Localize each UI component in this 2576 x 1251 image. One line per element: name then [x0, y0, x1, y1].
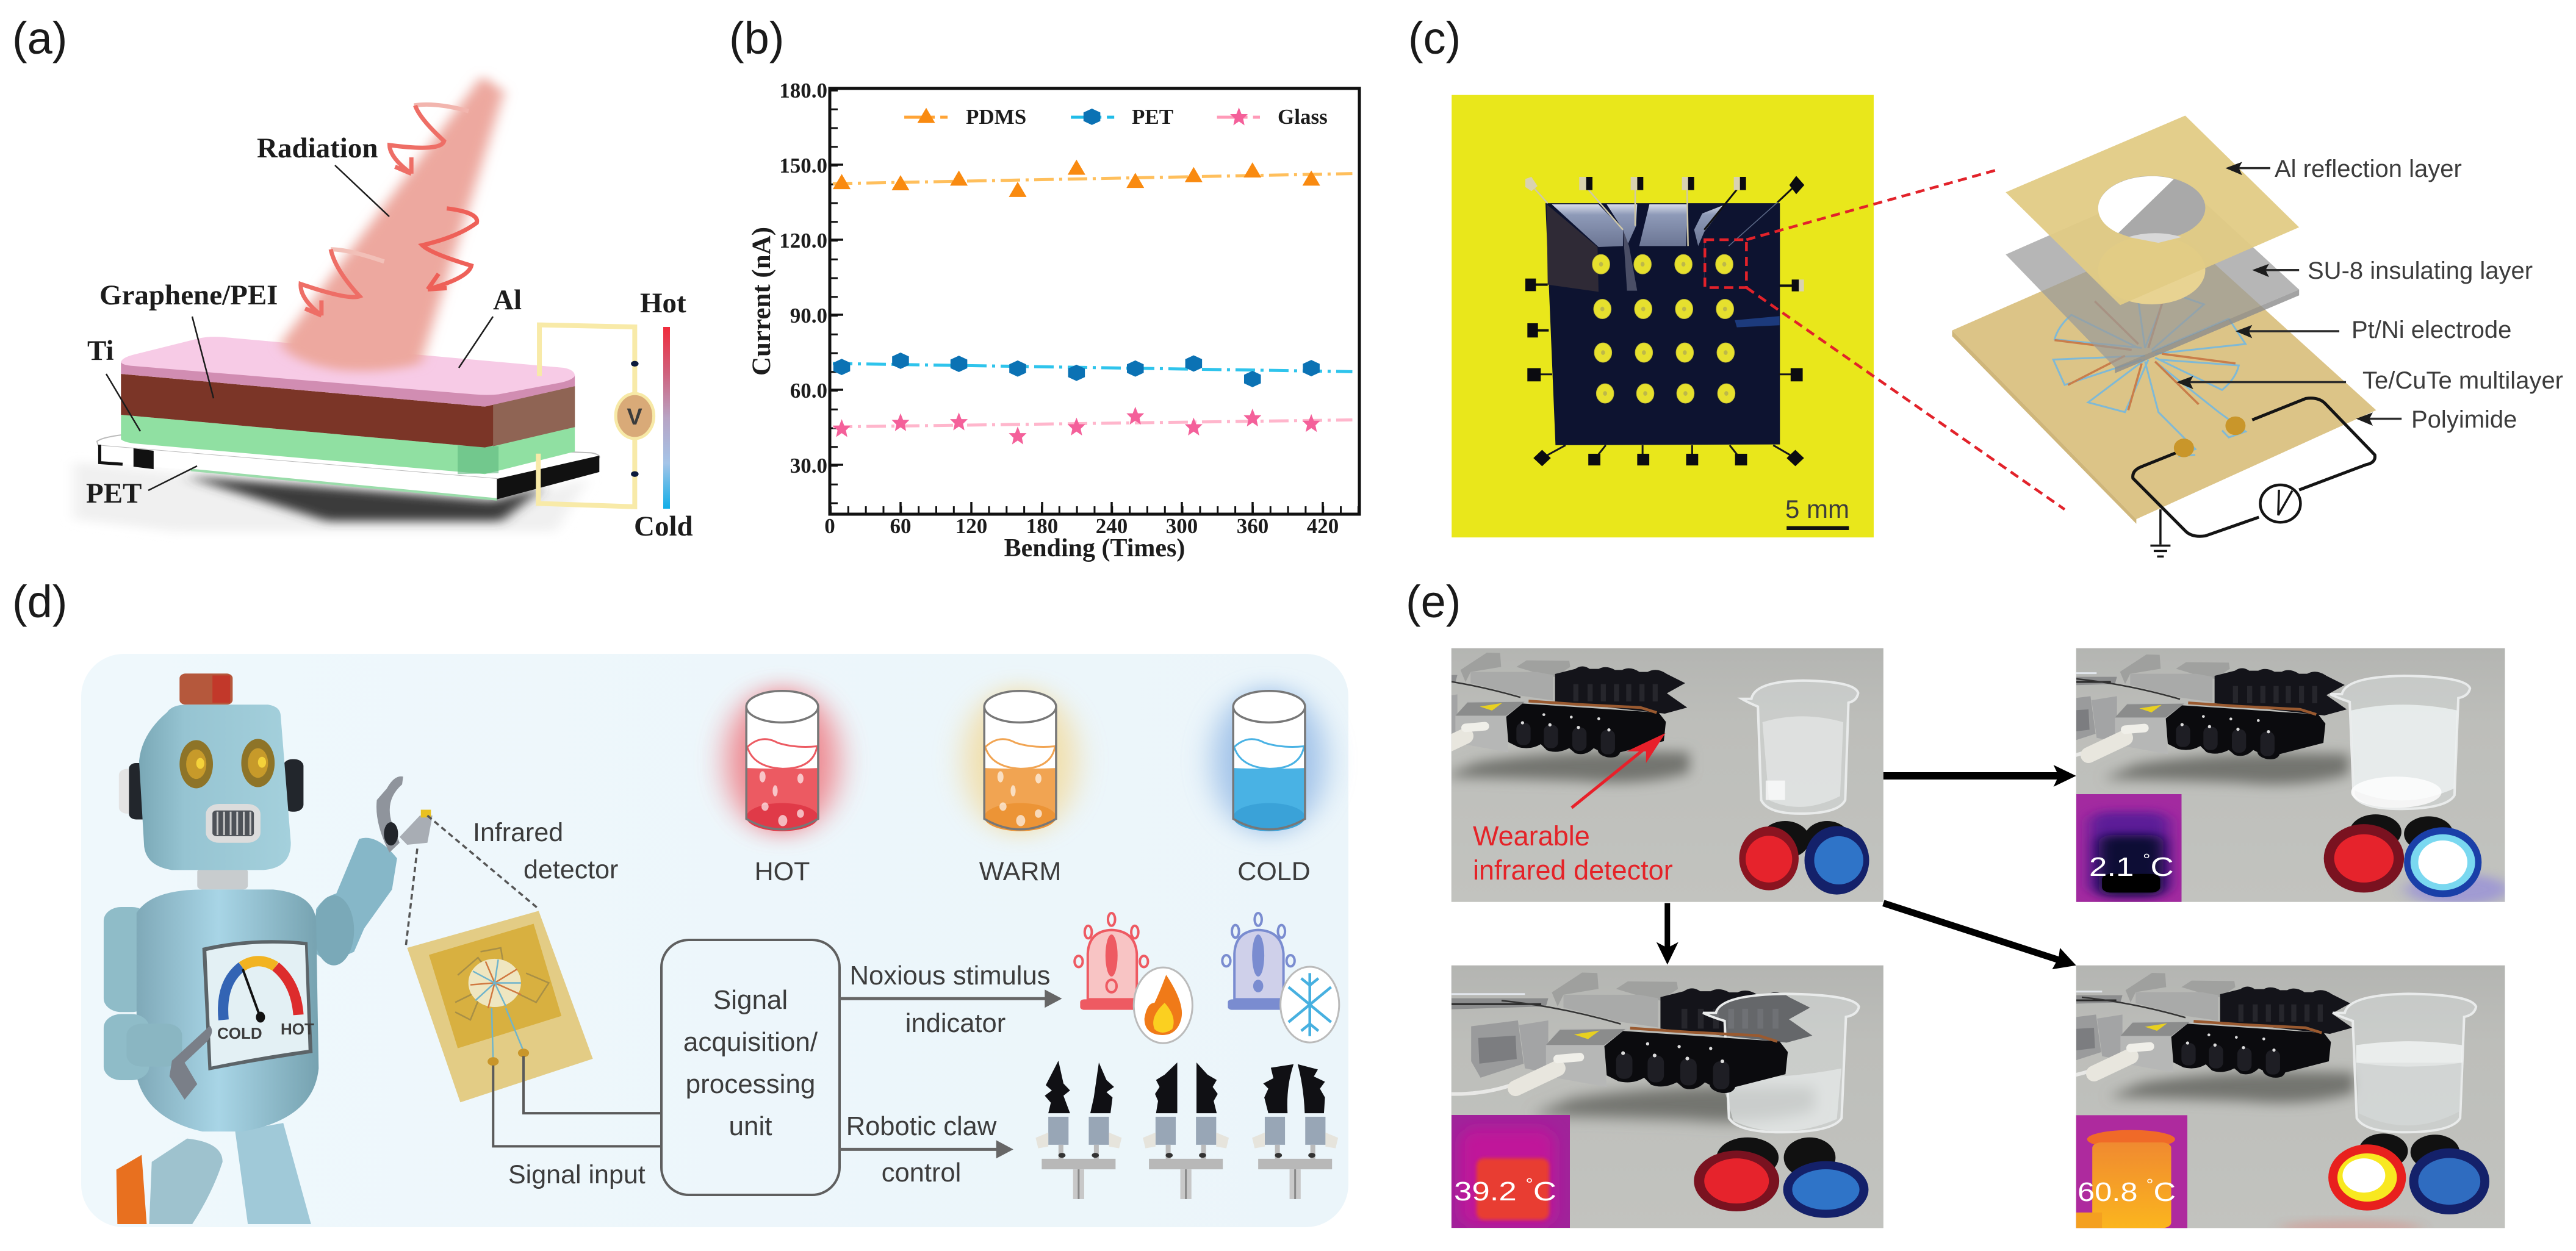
x tick labels: 300	[1166, 514, 1198, 538]
label Signal input: Signal input	[508, 1160, 646, 1189]
series Glass	[833, 407, 1352, 445]
y axis title: Current (nA)	[747, 227, 776, 376]
legend: PDMS	[966, 105, 1026, 129]
x tick labels: 120	[955, 514, 987, 538]
series PDMS	[833, 160, 1352, 197]
label SU-8 insulating layer: SU-8 insulating layer	[2308, 257, 2533, 284]
x tick labels: 240	[1096, 514, 1128, 538]
callout Wearable infrared detector: infrared detector	[1473, 855, 1673, 886]
scale label 5 mm: 5 mm	[1785, 495, 1849, 523]
beaker: warm	[965, 687, 1076, 834]
label Infrared detector: Infrared	[473, 818, 563, 847]
arrow: to warm state	[1657, 903, 1678, 964]
legend: PET	[1132, 105, 1173, 129]
axes frame and ticks	[830, 88, 1359, 514]
icon: red alarm with flame	[1074, 913, 1192, 1043]
photo 3: warm response	[1431, 966, 1883, 1228]
label Robotic claw control: Robotic claw	[846, 1112, 997, 1141]
panel label (d): (d)	[12, 576, 67, 627]
icon: robotic claws	[1035, 1061, 1338, 1199]
gauge text: COLD	[217, 1024, 262, 1042]
label Cold: Cold	[634, 511, 693, 542]
x tick labels: 360	[1237, 514, 1268, 538]
series PET	[833, 353, 1352, 387]
panel b: current vs bending chart	[747, 79, 1359, 562]
temperature labels: WARM	[979, 857, 1061, 886]
legend	[904, 105, 1328, 129]
label PET: PET	[86, 478, 142, 509]
label Al: Al	[493, 284, 522, 316]
label Radiation: Radiation	[257, 132, 378, 164]
y tick labels: 90.0	[790, 304, 827, 328]
colour scale bar	[663, 327, 670, 509]
label Al reflection layer: Al reflection layer	[2275, 156, 2462, 182]
x tick labels: 0	[824, 514, 835, 538]
box text: Signal	[713, 985, 788, 1015]
box text: acquisition/	[683, 1027, 818, 1057]
thermal reading 39.2 C: °	[1525, 1175, 1533, 1193]
gauge text hot: HOT	[281, 1020, 314, 1038]
thermal inset 60.8 C	[2076, 1115, 2187, 1228]
thermal reading 60.8 C: 60.8	[2078, 1177, 2137, 1207]
panel e: temperature response photos	[1356, 648, 2509, 1236]
box text: unit	[729, 1111, 772, 1141]
thermal reading 2.1 C: °	[2143, 851, 2151, 869]
x tick labels: 180	[1026, 514, 1058, 538]
panel label (c): (c)	[1408, 13, 1461, 63]
label Polyimide: Polyimide	[2411, 406, 2517, 433]
photo 4: hot response	[2076, 965, 2505, 1228]
beaker: cold	[1214, 687, 1325, 834]
y tick labels: 150.0	[779, 154, 827, 177]
y tick labels: 120.0	[779, 229, 827, 253]
label Noxious stimulus indicator: indicator	[905, 1009, 1006, 1038]
y tick labels	[779, 79, 827, 478]
voltmeter V: V	[627, 404, 642, 430]
thermal reading 60.8 C: C	[2153, 1177, 2176, 1207]
thermal inset 39.2 C	[1452, 1115, 1570, 1228]
detector chip with zoom lines	[406, 815, 661, 1146]
y tick labels: 30.0	[790, 454, 827, 478]
legend: Glass	[1278, 105, 1328, 129]
label Noxious stimulus indicator	[850, 961, 1050, 1038]
panel d: robot perception system	[81, 654, 1348, 1227]
thermal reading 60.8 C: °	[2146, 1176, 2153, 1194]
label Infrared detector	[473, 818, 618, 884]
icon: blue alarm with snowflake	[1222, 913, 1339, 1042]
rounded background	[81, 654, 1348, 1227]
x tick labels: 420	[1307, 514, 1339, 538]
label Infrared detector: detector	[523, 855, 618, 884]
box text	[683, 985, 818, 1141]
panel label (a): (a)	[12, 13, 67, 63]
device stack and radiation beam	[74, 76, 654, 531]
label Ti: Ti	[87, 335, 114, 367]
thermal reading 2.1 C: 2.1	[2089, 852, 2134, 882]
photo of detector array	[1452, 95, 1874, 537]
zoom-in dashed red guides	[1705, 170, 2065, 509]
panel label (b): (b)	[729, 13, 784, 63]
box text: processing	[686, 1069, 815, 1099]
label Hot: Hot	[640, 287, 686, 319]
y tick labels: 180.0	[779, 79, 827, 102]
photo 2: cold response	[2076, 648, 2505, 902]
callout Wearable infrared detector: Wearable	[1473, 820, 1590, 851]
beaker: hot	[727, 687, 838, 834]
panel c: sensor array photo and exploded view	[1452, 95, 2563, 556]
photo 1: baseline with detector callout	[1451, 648, 1883, 902]
panel label (e): (e)	[1406, 576, 1461, 627]
label Pt/Ni electrode: Pt/Ni electrode	[2351, 317, 2511, 343]
x axis title: Bending (Times)	[1004, 534, 1185, 562]
exploded device layers	[1952, 116, 2402, 556]
y tick labels: 60.0	[790, 379, 827, 403]
label Noxious stimulus indicator: Noxious stimulus	[850, 961, 1050, 991]
thermal reading 2.1 C: C	[2151, 852, 2174, 882]
callout Wearable infrared detector	[1473, 820, 1673, 886]
thermal inset 2.1 C	[2076, 794, 2181, 902]
processing unit box	[661, 940, 840, 1195]
temperature labels: HOT	[755, 857, 810, 886]
arrow: to hot state	[1883, 903, 2076, 969]
thermal reading 39.2 C: 39.2	[1454, 1177, 1517, 1206]
label Te/CuTe multilayer: Te/CuTe multilayer	[2362, 367, 2563, 394]
temperature labels	[755, 857, 1311, 886]
x tick labels: 60	[890, 514, 912, 538]
thermal reading 39.2 C: C	[1533, 1177, 1556, 1206]
label Robotic claw control: control	[882, 1158, 961, 1188]
output arrows	[840, 989, 1062, 1158]
leader lines	[106, 165, 493, 490]
label Robotic claw control	[846, 1112, 997, 1188]
label Graphene/PEI: Graphene/PEI	[99, 279, 278, 311]
robot	[104, 673, 433, 1224]
arrow: to cold state	[1883, 765, 2076, 787]
panel a: layered detector schematic	[74, 76, 693, 542]
temperature labels: COLD	[1237, 857, 1311, 886]
x tick labels	[824, 514, 1339, 538]
